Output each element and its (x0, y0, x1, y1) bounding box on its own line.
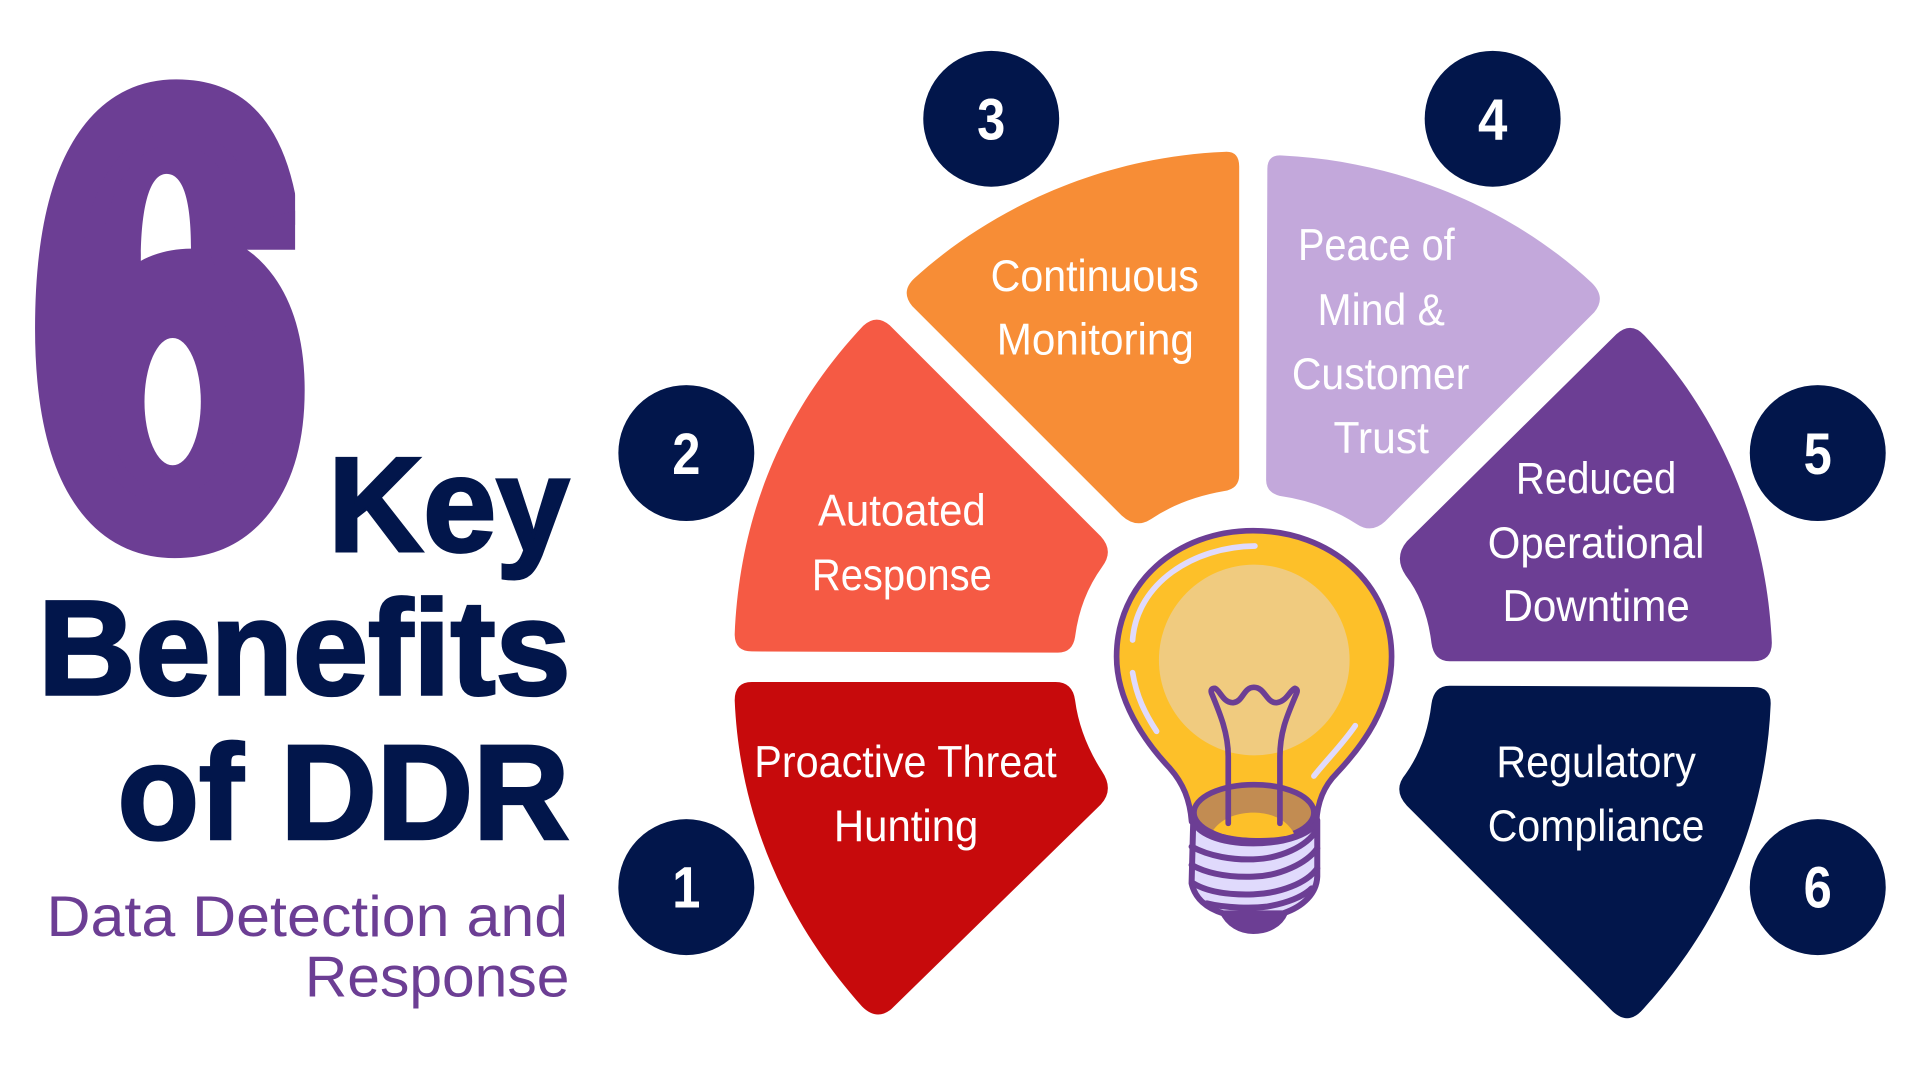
filament (1211, 687, 1297, 823)
heading line: of DDR: of DDR (118, 717, 569, 868)
segment label: Proactive Threat (754, 738, 1057, 787)
segment shape (1400, 328, 1772, 661)
number badge 1 (618, 819, 754, 955)
segment label: Mind & (1318, 286, 1445, 335)
subtitle: Data Detection and (47, 885, 568, 949)
number badge 6 (1750, 819, 1886, 955)
panel 6: Regulatory Compliance (1399, 686, 1771, 1018)
panel 4: Peace of Mind & Customer Trust (1266, 155, 1600, 528)
segment shape (1266, 155, 1600, 528)
panel 5: Reduced Operational Downtime (1400, 328, 1772, 661)
inner glow (1159, 565, 1350, 755)
screw base (1192, 820, 1317, 933)
segment label: Hunting (834, 802, 978, 851)
number badge 1: 1 (672, 855, 700, 920)
number badge 4: 4 (1478, 88, 1508, 153)
segment label: Monitoring (997, 315, 1194, 364)
number badge 6: 6 (1804, 855, 1832, 920)
segment label: Operational (1488, 519, 1704, 568)
panel 3: Continuous Monitoring (907, 152, 1239, 523)
segment label: Downtime (1502, 582, 1690, 631)
segment shape (907, 152, 1239, 523)
segment shape (735, 320, 1108, 653)
segment label (812, 486, 992, 600)
number badge 3 (923, 51, 1059, 187)
segment label: Customer (1292, 350, 1469, 399)
segment label: Compliance (1488, 802, 1704, 851)
segment label (1488, 738, 1704, 851)
segment label: Peace of (1298, 221, 1455, 270)
number badge 5 (1750, 385, 1886, 521)
subtitle: Response (305, 946, 569, 1010)
segment label: Autoated (818, 486, 986, 535)
segment label (754, 738, 1057, 851)
title block (38, 0, 571, 1010)
number badge 4 (1425, 51, 1561, 187)
segment label: Response (812, 551, 992, 600)
segment label (1292, 221, 1469, 463)
bulb glass (1117, 531, 1392, 822)
segment shape (1399, 686, 1771, 1018)
segment label: Trust (1333, 414, 1429, 463)
segment label (1488, 454, 1704, 631)
big number 6: 6 (39, 0, 301, 653)
subtitle (47, 885, 569, 1010)
neck inner light (1213, 813, 1294, 838)
panel 1: Proactive Threat Hunting (735, 682, 1108, 1015)
number badge 5: 5 (1804, 422, 1832, 487)
segment shape (735, 682, 1108, 1015)
number badge 2 (618, 385, 754, 521)
segment label (991, 252, 1199, 364)
heading line: Key: Key (328, 429, 569, 580)
panel 2: Autoated Response (735, 320, 1108, 653)
icon: light bulb (1117, 531, 1392, 933)
segment label: Reduced (1516, 454, 1676, 503)
segment label: Continuous (991, 252, 1199, 301)
number badge 3: 3 (977, 88, 1005, 153)
number badge 2: 2 (672, 422, 700, 487)
bulb neck opening (1194, 785, 1314, 841)
heading line: Benefits: Benefits (38, 572, 571, 723)
segment label: Regulatory (1496, 738, 1696, 787)
glass highlights (1133, 546, 1355, 776)
